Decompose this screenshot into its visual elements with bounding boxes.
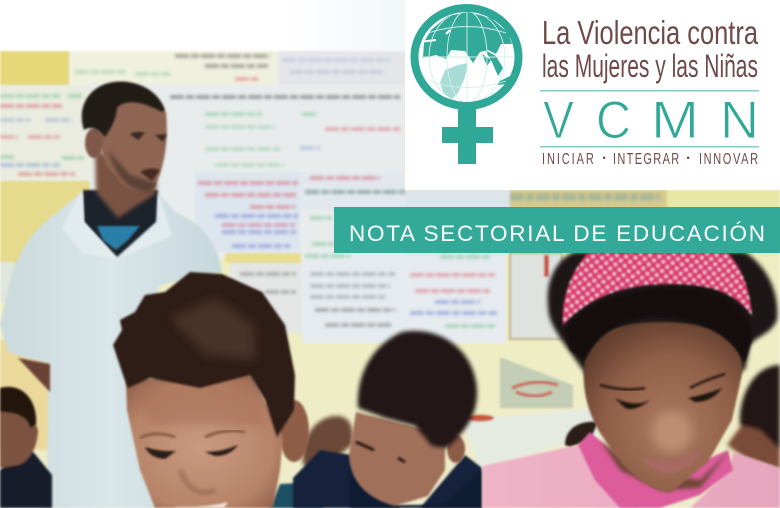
tagline: INICIAR: [542, 150, 594, 167]
hair: [82, 82, 165, 137]
logo panel: [405, 0, 780, 190]
eyes: [356, 442, 405, 462]
collar: [62, 190, 172, 259]
headband: [563, 253, 752, 325]
eyebrows: [140, 431, 245, 438]
acronym: [543, 91, 759, 150]
acronym: M: [651, 91, 699, 150]
smile: [175, 502, 228, 508]
hair: [113, 272, 295, 437]
neck: [95, 150, 156, 218]
poster handwriting: [0, 56, 660, 326]
face: [584, 322, 743, 493]
rule: [540, 146, 759, 148]
turtleneck: [578, 432, 733, 508]
second boy: [293, 331, 482, 508]
organization name: [542, 14, 758, 84]
neck: [600, 440, 730, 490]
eyes: [130, 132, 167, 142]
face: [99, 97, 167, 192]
rule: [540, 90, 759, 92]
shirt: [83, 190, 158, 257]
tagline: [542, 150, 758, 167]
northern land mass: [423, 12, 512, 63]
acronym: V: [543, 91, 575, 150]
nose shadow: [180, 470, 215, 492]
blue shirt opening: [97, 226, 140, 250]
face: [126, 372, 283, 508]
hair: [548, 252, 777, 380]
forearm: [18, 358, 50, 392]
boy collar: [270, 483, 325, 508]
globe: [418, 11, 516, 103]
logo: [414, 8, 759, 167]
boy in foreground: [113, 272, 325, 508]
ear: [85, 128, 103, 158]
nose: [652, 412, 692, 452]
female symbol cross: [442, 108, 493, 164]
tagline: ·: [602, 150, 607, 167]
female symbol ring: [414, 8, 518, 106]
hair: [358, 331, 477, 448]
tagline: INTEGRAR: [613, 150, 679, 167]
tagline: ·: [686, 150, 691, 167]
eyes: [145, 445, 238, 459]
man in white coat: [0, 82, 222, 508]
acronym: N: [720, 91, 759, 150]
banner title: NOTA SECTORIAL DE EDUCACIÓN: [349, 221, 765, 246]
eyebrows and eyes: [600, 374, 725, 389]
navy shirt: [293, 450, 482, 508]
ear: [279, 400, 309, 462]
small boy at left: [0, 387, 52, 508]
tagline: INNOVAR: [699, 150, 758, 167]
grid lines: [420, 11, 514, 103]
sign lettering: [512, 382, 558, 396]
beard shadow: [108, 150, 158, 192]
banner: [334, 207, 780, 253]
mouth: [140, 168, 160, 181]
forehead hair: [566, 288, 752, 362]
coat: [0, 192, 222, 508]
acronym: C: [596, 91, 631, 150]
top white band: [0, 0, 405, 51]
coastline highlights: [420, 30, 450, 42]
dress: [482, 445, 780, 508]
forehead shade: [130, 380, 270, 425]
girl: [482, 252, 780, 508]
face: [349, 412, 445, 506]
asia islands: [482, 50, 510, 85]
background child: [303, 416, 353, 470]
child at right edge: [727, 365, 780, 470]
lips: [642, 450, 702, 474]
child in background at right of table: [565, 422, 598, 447]
africa: [440, 63, 468, 100]
